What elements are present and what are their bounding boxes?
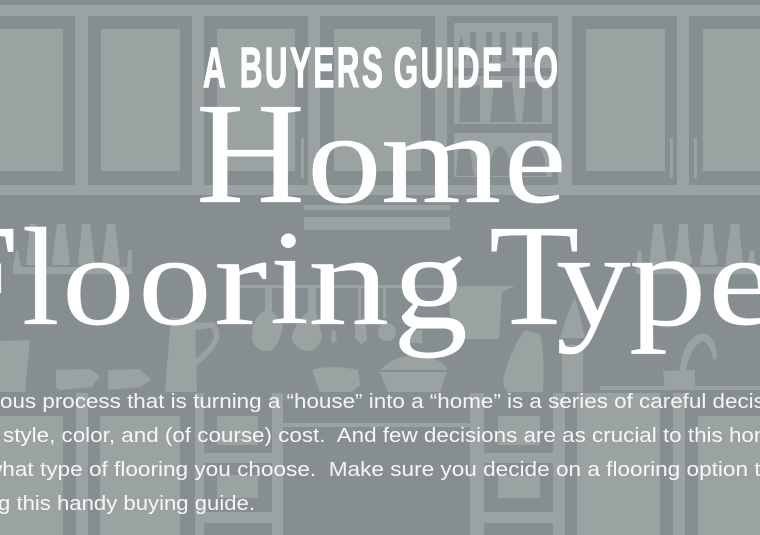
heading: Flooring Types: n bbox=[308, 209, 390, 353]
heading: Flooring Types: l bbox=[22, 200, 60, 355]
heading: Flooring Types: r bbox=[214, 209, 268, 353]
counter items bbox=[0, 298, 760, 392]
intro paragraph: ous process that is turning a “house” into a “home” is a series of careful decisions bbox=[0, 391, 760, 413]
left shelf with bottles bbox=[13, 224, 132, 274]
intro paragraph: g this handy buying guide. bbox=[0, 493, 255, 515]
heading: Flooring Types: y bbox=[556, 206, 631, 355]
upper cabinets bbox=[0, 5, 760, 195]
intro paragraph bbox=[0, 391, 760, 515]
heading: Flooring Types: T bbox=[488, 196, 579, 356]
intro paragraph: what type of flooring you choose. Make sure you decide on a flooring option that bbox=[0, 459, 760, 481]
heading: Home: m bbox=[380, 87, 501, 231]
heading: Flooring Types bbox=[0, 196, 760, 359]
heading: Home: e bbox=[504, 87, 566, 231]
heading: Home: H bbox=[196, 74, 305, 234]
heading: Flooring Types: i bbox=[270, 204, 308, 353]
kicker: a buyers guide to: GUIDE bbox=[394, 35, 505, 99]
intro paragraph: style, color, and (of course) cost. And few decisions are as crucial to this home bbox=[3, 425, 760, 447]
kicker: a buyers guide to: BUYERS bbox=[240, 35, 385, 99]
right shelf with bottles bbox=[636, 224, 756, 274]
heading: Home: o bbox=[307, 87, 381, 231]
kicker: a buyers guide to: TO bbox=[513, 35, 561, 99]
hanging rail with pots and utensils bbox=[240, 285, 515, 351]
heading: Flooring Types: o bbox=[62, 209, 134, 353]
kicker: a buyers guide to: A bbox=[203, 35, 228, 99]
heading: Home bbox=[196, 74, 566, 234]
heading: Flooring Types: o bbox=[138, 209, 211, 353]
heading: Flooring Types: p bbox=[629, 206, 707, 355]
heading: Flooring Types: g bbox=[393, 204, 468, 359]
lower cabinets bbox=[0, 393, 760, 535]
range hood shelf bbox=[304, 205, 450, 230]
kicker: a buyers guide to bbox=[203, 35, 561, 99]
